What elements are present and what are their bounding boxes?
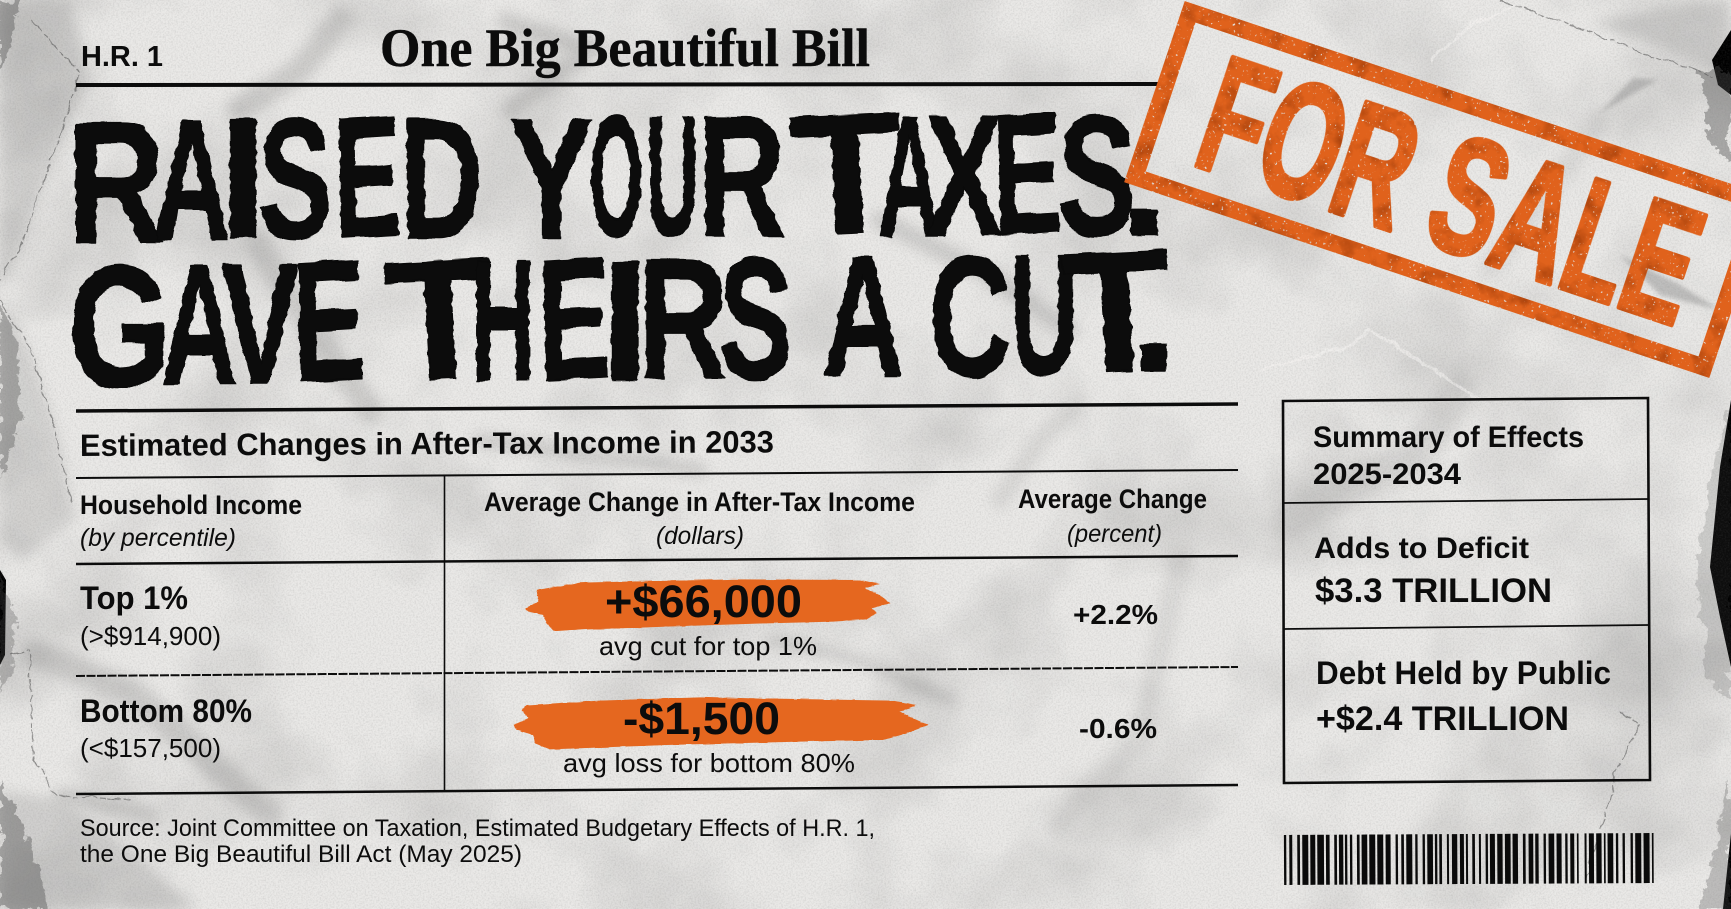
headline: S <box>258 83 332 275</box>
summary heading <box>1313 421 1584 491</box>
column header: household income <box>80 490 302 552</box>
row: top 1% value: +$66,000 <box>605 576 802 627</box>
source note <box>80 815 875 868</box>
headline: T <box>381 222 499 419</box>
table heading: Estimated Changes in After-Tax Income in 2033 <box>80 424 774 463</box>
masthead title: One Big Beautiful Bill <box>380 18 870 78</box>
column header: household income: (by percentile) <box>80 524 236 552</box>
masthead rule <box>76 84 1162 85</box>
headline: U <box>1010 219 1078 411</box>
column header: average change in dollars: (dollars) <box>656 522 744 550</box>
headline: C <box>929 221 1011 413</box>
headline: H <box>471 225 535 417</box>
column header: average change in dollars <box>484 487 915 550</box>
row: top 1% value: avg cut for top 1% <box>599 631 817 661</box>
row: bottom 80% value: avg loss for bottom 80% <box>563 748 855 778</box>
headline: R <box>638 223 728 415</box>
row: bottom 80% label: (<$157,500) <box>80 733 221 763</box>
summary: adds to deficit: Adds to Deficit <box>1314 532 1529 565</box>
summary: debt held by public: +$2.4 TRILLION <box>1316 700 1569 738</box>
column header: household income: Household Income <box>80 490 302 520</box>
headline: A <box>822 221 904 413</box>
column header: average change in dollars: Average Change in After-Tax Income <box>484 487 915 517</box>
row: top 1% label: (>$914,900) <box>80 621 221 651</box>
headline: . <box>1130 215 1178 407</box>
headline: S <box>719 223 792 415</box>
row: bottom 80% highlight brush <box>513 697 928 749</box>
summary: debt held by public: Debt Held by Public <box>1316 655 1611 691</box>
headline: R <box>67 87 165 279</box>
headline: I <box>601 225 649 417</box>
headline: X <box>926 80 1002 272</box>
headline: E <box>534 223 613 417</box>
headline: E <box>330 81 403 275</box>
summary heading: Summary of Effects <box>1313 421 1584 454</box>
headline: G <box>68 231 171 423</box>
summary: adds to deficit: $3.3 TRILLION <box>1315 572 1552 610</box>
row: bottom 80% label <box>80 693 252 763</box>
row: bottom 80% percent: -0.6% <box>1079 713 1157 744</box>
headline: O <box>589 81 643 273</box>
headline <box>67 75 1178 423</box>
headline: I <box>219 83 267 275</box>
headline: A <box>161 229 237 421</box>
summary: adds to deficit <box>1314 532 1552 610</box>
barcode <box>1284 833 1654 885</box>
row: top 1% percent: +2.2% <box>1073 599 1158 630</box>
table grid lines <box>76 470 1238 794</box>
table section rule <box>76 404 1238 411</box>
headline: U <box>646 81 699 273</box>
source note: the One Big Beautiful Bill Act (May 2025) <box>80 841 522 868</box>
headline: T <box>787 75 907 273</box>
row: top 1% value <box>599 576 817 661</box>
column header: average change in percent: (percent) <box>1067 520 1162 548</box>
masthead label: H.R. 1: H.R. 1 <box>81 41 163 73</box>
row: top 1% label <box>80 580 221 651</box>
panel: summary of effects <box>1283 398 1650 783</box>
row: bottom 80% label: Bottom 80% <box>80 693 252 729</box>
headline: E <box>989 78 1064 272</box>
headline: A <box>878 81 940 273</box>
headline: . <box>1120 80 1168 272</box>
headline: Y <box>509 83 594 275</box>
headline: S <box>1058 80 1136 272</box>
headline: R <box>698 81 785 273</box>
column header: average change in percent <box>1018 484 1207 548</box>
source note: Source: Joint Committee on Taxation, Estimated Budgetary Effects of H.R. 1, <box>80 815 875 842</box>
summary heading: 2025-2034 <box>1313 458 1461 491</box>
row: top 1% label: Top 1% <box>80 580 188 616</box>
column header: average change in percent: Average Change <box>1018 484 1207 514</box>
panel: after-tax income table <box>76 424 1238 794</box>
headline: A <box>153 85 230 277</box>
row: top 1% highlight brush <box>525 579 890 631</box>
headline: D <box>400 83 483 275</box>
summary: debt held by public <box>1316 655 1611 738</box>
headline: E <box>289 225 368 419</box>
headline: V <box>222 228 299 420</box>
row: bottom 80% value <box>563 693 855 778</box>
headline: T <box>1058 214 1176 411</box>
row: bottom 80% value: -$1,500 <box>623 693 780 744</box>
